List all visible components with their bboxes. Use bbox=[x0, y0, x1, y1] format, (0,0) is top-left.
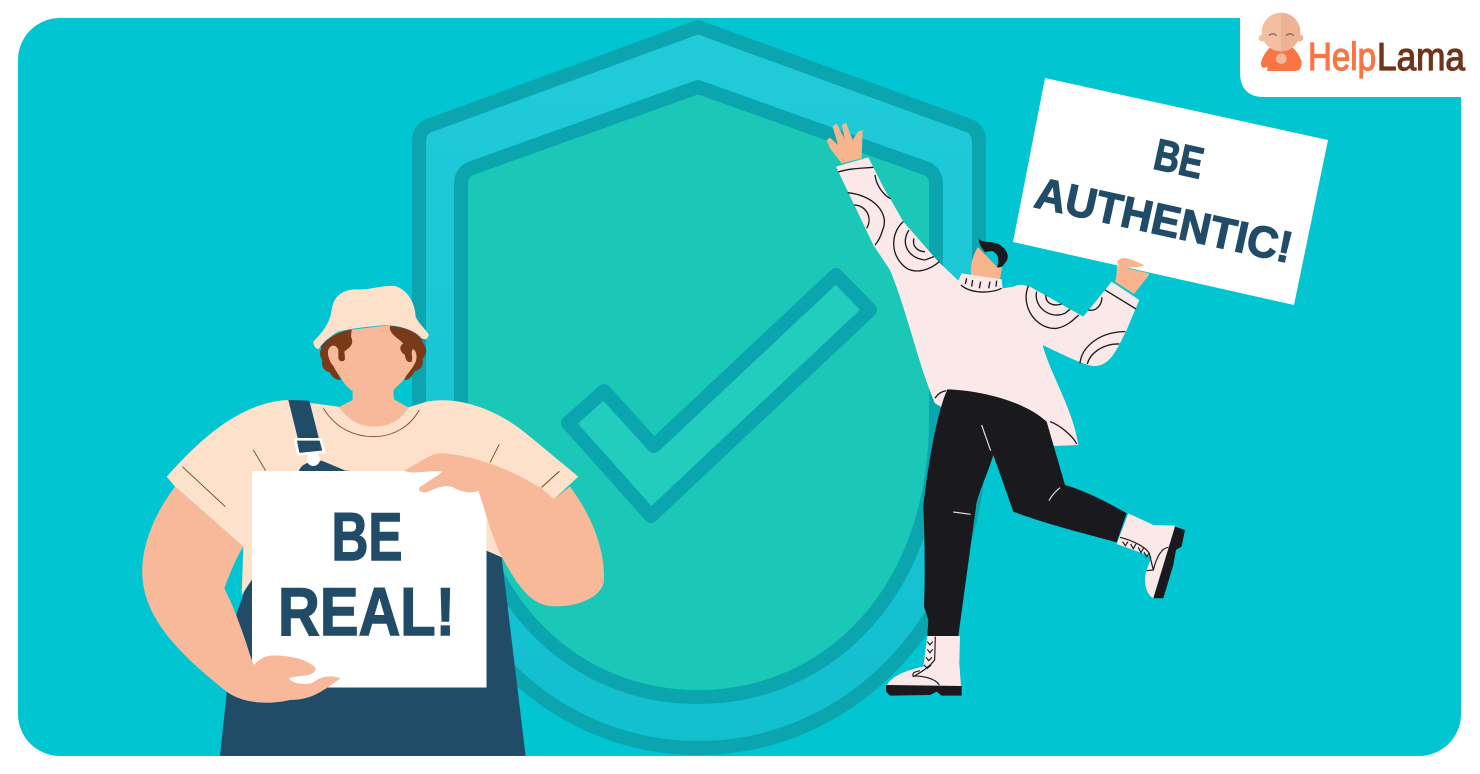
overalls bbox=[220, 471, 526, 756]
icon: shield with check mark bbox=[419, 27, 979, 748]
logo: HelpLama: Help bbox=[1308, 36, 1376, 79]
lifted hand bbox=[1115, 258, 1149, 294]
t-shirt bbox=[167, 400, 578, 595]
sign: be real: REAL! bbox=[278, 574, 455, 650]
shirt detail lines bbox=[182, 408, 559, 507]
logo: HelpLama bbox=[1259, 13, 1465, 79]
person: man holding sign overhead bbox=[827, 123, 1185, 696]
sweater bbox=[836, 157, 1139, 446]
sign: be real bbox=[252, 471, 486, 688]
sign: be authentic: BE bbox=[1150, 130, 1208, 189]
front boot bbox=[887, 636, 961, 686]
sign: be authentic bbox=[1013, 78, 1328, 305]
strap button bbox=[307, 453, 320, 466]
trousers bbox=[923, 389, 1127, 636]
head and hair bbox=[971, 238, 1008, 280]
arms and hands bbox=[142, 453, 604, 703]
neck and lower face bbox=[338, 347, 408, 427]
strap buckle bbox=[295, 439, 324, 454]
logo tab: white corner cutout bbox=[1240, 0, 1480, 97]
hand gripping sign bbox=[1117, 258, 1149, 294]
raised hand bbox=[827, 123, 863, 163]
sign: be authentic: AUTHENTIC! bbox=[1031, 169, 1297, 273]
person: woman holding sign bbox=[142, 286, 604, 756]
sweater swirl lines bbox=[838, 167, 1136, 444]
overalls bib top bbox=[299, 461, 347, 471]
sign: be real: BE bbox=[332, 499, 402, 575]
overalls strap bbox=[288, 400, 319, 441]
back boot bbox=[1117, 513, 1175, 598]
logo: HelpLama: Lama bbox=[1377, 36, 1465, 79]
head: face, hair, hat bbox=[313, 286, 429, 391]
